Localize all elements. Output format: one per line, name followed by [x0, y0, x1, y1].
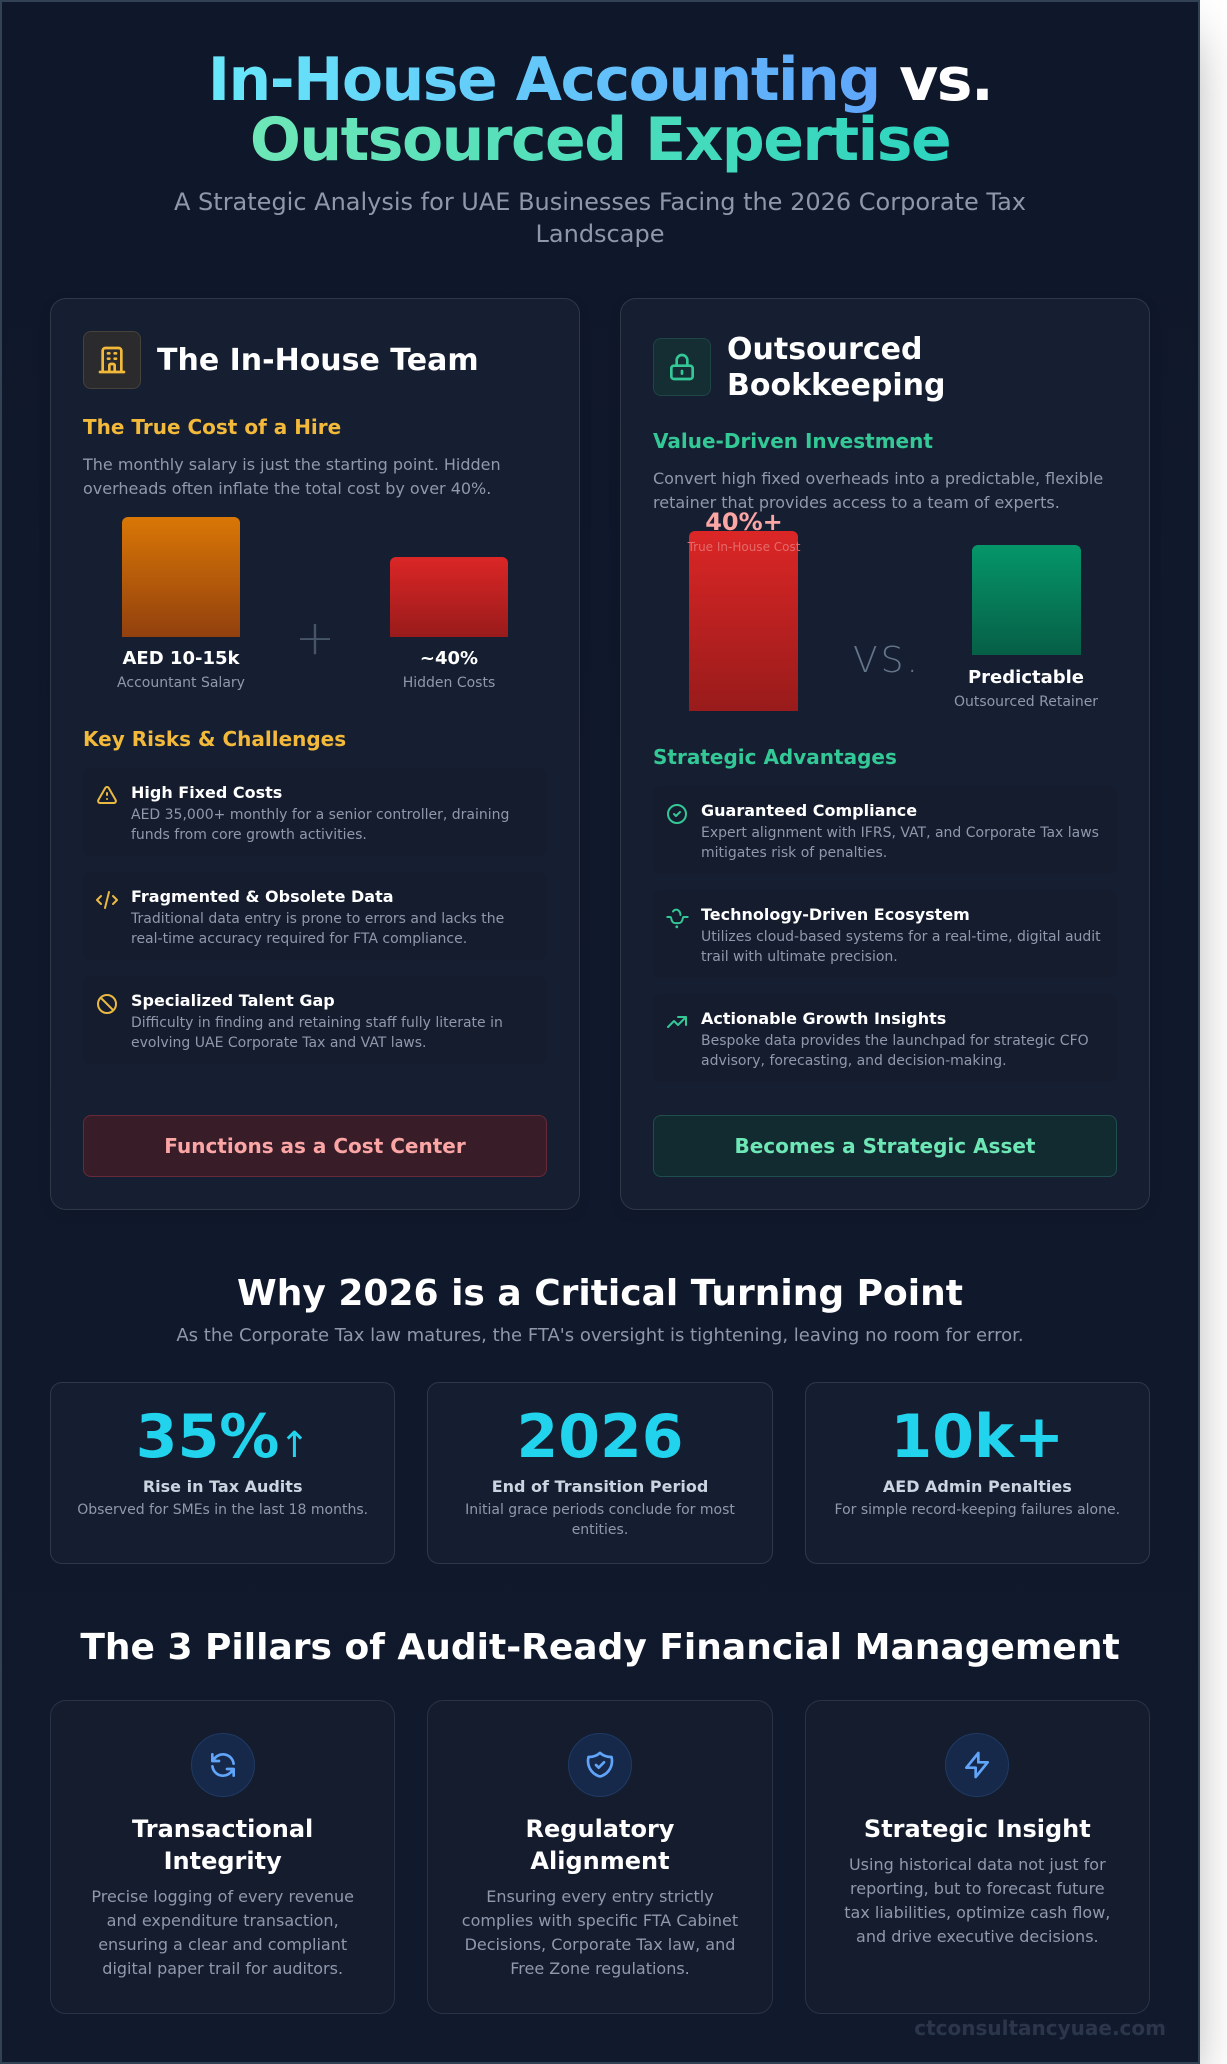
stat label: AED Admin Penalties	[883, 1477, 1072, 1496]
panel heading: The In-House Team	[157, 343, 479, 378]
pillar text: tax liabilities, optimize cash flow,	[844, 1903, 1110, 1922]
label: true in-house caption: True In-House Cost	[688, 540, 800, 554]
label: hidden costs value: ~40%	[420, 648, 478, 669]
panel heading	[727, 332, 945, 403]
text block: value intro	[653, 469, 1103, 512]
risk text	[130, 911, 504, 947]
bar: hidden costs	[390, 557, 508, 637]
icon: check circle	[667, 804, 687, 824]
subtitle: A Strategic Analysis for UAE Businesses Facing the 2026 Corporate Tax	[174, 188, 1026, 216]
callout: strategic asset	[653, 1115, 1117, 1177]
icon: shield check	[568, 1733, 632, 1797]
risk text	[131, 1015, 503, 1051]
advantage title: Guaranteed Compliance	[701, 801, 917, 820]
heading: why 2026: Why 2026 is a Critical Turning Point	[237, 1273, 963, 1314]
pillar title	[526, 1815, 674, 1875]
bar: accountant salary	[122, 517, 240, 637]
icon: warning	[97, 786, 117, 804]
stat number: 10k+	[890, 1402, 1064, 1472]
stat number: 2026	[516, 1402, 683, 1472]
risk: fragmented data	[83, 872, 547, 960]
heading: value-driven investment: Value-Driven Investment	[653, 429, 933, 453]
icon: trending up	[667, 1016, 687, 1028]
icon: lock	[653, 338, 711, 396]
heading: 3 pillars: The 3 Pillars of Audit-Ready Financial Management	[80, 1627, 1120, 1668]
title: Outsourced Expertise	[250, 105, 950, 175]
advantage text: trail with ultimate precision.	[701, 949, 898, 965]
callout: cost center: Functions as a Cost Center	[164, 1134, 466, 1158]
pillar text: complies with specific FTA Cabinet	[462, 1911, 738, 1930]
panel heading: Outsourced	[727, 332, 922, 367]
panel: outsourced bookkeeping	[620, 298, 1150, 1210]
risk title: Specialized Talent Gap	[131, 991, 335, 1010]
pillar text: Ensuring every entry strictly	[486, 1887, 714, 1906]
label: true in-house value: 40%+	[705, 508, 783, 536]
pillar title: Transactional	[132, 1815, 313, 1843]
advantage text	[701, 1033, 1089, 1069]
label: predictable caption: Outsourced Retainer	[954, 694, 1098, 710]
risk text	[131, 807, 509, 843]
pillar title: Alignment	[530, 1847, 670, 1875]
risk: talent gap	[83, 976, 547, 1064]
stat number: 35%↑	[136, 1402, 310, 1472]
pillar text	[91, 1887, 354, 1978]
risk: high fixed costs	[83, 768, 547, 856]
panel: the in-house team	[50, 298, 580, 1210]
pillar text: Decisions, Corporate Tax law, and	[465, 1935, 735, 1954]
stat card: admin penalties	[805, 1382, 1150, 1564]
stat text: entities.	[572, 1522, 628, 1538]
text block: why 2026 subtitle: As the Corporate Tax law matures, the FTA's oversight is tightening, leaving no room for error.	[176, 1325, 1024, 1346]
heading: key risks: Key Risks & Challenges	[83, 727, 346, 751]
title: In-House Accounting vs.	[208, 45, 992, 115]
stat label: Rise in Tax Audits	[143, 1477, 302, 1496]
pillar text: and expenditure transaction,	[107, 1911, 339, 1930]
plus sign: +	[295, 610, 335, 666]
bar: true in-house cost	[689, 531, 798, 711]
advantage text: mitigates risk of penalties.	[701, 845, 887, 861]
label: accountant salary caption: Accountant Salary	[117, 675, 245, 691]
pillar text: reporting, but to forecast future	[850, 1879, 1105, 1898]
icon: building	[83, 331, 141, 389]
pillar title: Integrity	[164, 1847, 282, 1875]
risk text: evolving UAE Corporate Tax and VAT laws.	[131, 1035, 426, 1051]
advantage text	[701, 929, 1101, 965]
stat text	[465, 1502, 735, 1538]
subtitle: Landscape	[536, 220, 664, 248]
risk title: Fragmented & Obsolete Data	[131, 887, 394, 906]
pillar text	[462, 1887, 738, 1978]
pillar text: Precise logging of every revenue	[91, 1887, 354, 1906]
stat text: Initial grace periods conclude for most	[465, 1502, 735, 1518]
heading: strategic advantages: Strategic Advantages	[653, 745, 897, 769]
stat card: end of transition	[427, 1382, 773, 1564]
label: accountant salary value: AED 10-15k	[122, 648, 239, 669]
icon: ban	[97, 994, 117, 1014]
label: predictable value: Predictable	[968, 667, 1084, 688]
text block: value intro: retainer that provides access to a team of experts.	[653, 493, 1060, 512]
advantage title: Actionable Growth Insights	[701, 1009, 946, 1028]
risk text: Traditional data entry is prone to errors and lacks the	[131, 911, 504, 927]
advantage text	[701, 825, 1099, 861]
icon: code	[96, 891, 118, 909]
pillar text: ensuring a clear and compliant	[98, 1935, 347, 1954]
callout: cost center	[83, 1115, 547, 1177]
advantage text: Bespoke data provides the launchpad for strategic CFO	[701, 1033, 1089, 1049]
advantage: guaranteed compliance	[653, 786, 1117, 874]
panel heading: Bookkeeping	[727, 368, 945, 403]
pillar text: digital paper trail for auditors.	[102, 1959, 343, 1978]
vs text: VS.	[853, 640, 921, 681]
pillar text: and drive executive decisions.	[856, 1927, 1099, 1946]
stat card: tax audits	[50, 1382, 395, 1564]
stat label: End of Transition Period	[492, 1477, 708, 1496]
heading: true cost of a hire: The True Cost of a Hire	[83, 415, 341, 439]
advantage text: advisory, forecasting, and decision-making.	[701, 1053, 1007, 1069]
text block: cost intro	[82, 455, 501, 498]
text block: cost intro: overheads often inflate the total cost by over 40%.	[83, 479, 491, 498]
pillar title	[132, 1815, 313, 1875]
stat text: For simple record-keeping failures alone.	[835, 1502, 1120, 1518]
advantage text: Utilizes cloud-based systems for a real-time, digital audit	[701, 929, 1101, 945]
advantage title: Technology-Driven Ecosystem	[701, 905, 970, 924]
text block: value intro: Convert high fixed overheads into a predictable, flexible	[653, 469, 1103, 488]
subtitle	[174, 188, 1026, 248]
watermark: ctconsultancyuae.com	[914, 2016, 1166, 2040]
bar: outsourced retainer	[972, 545, 1081, 655]
pillar: regulatory alignment	[427, 1700, 773, 2014]
pillar title: Strategic Insight	[864, 1815, 1091, 1843]
pillar: strategic insight	[805, 1700, 1150, 2014]
advantage: growth insights	[653, 994, 1117, 1082]
pillar text: Using historical data not just for	[849, 1855, 1106, 1874]
pillar: transactional integrity	[50, 1700, 395, 2014]
risk title: High Fixed Costs	[131, 783, 282, 802]
icon: refresh	[191, 1733, 255, 1797]
stat text: Observed for SMEs in the last 18 months.	[77, 1502, 368, 1518]
label: hidden costs caption: Hidden Costs	[403, 675, 495, 691]
icon: technology	[666, 908, 689, 928]
pillar title: Regulatory	[526, 1815, 674, 1843]
icon: lightning	[945, 1733, 1009, 1797]
risk text: AED 35,000+ monthly for a senior controller, draining	[131, 807, 509, 823]
risk text: funds from core growth activities.	[131, 827, 367, 843]
advantage: technology ecosystem	[653, 890, 1117, 978]
bar chart: cost comparison	[688, 508, 1098, 711]
advantage text: Expert alignment with IFRS, VAT, and Corporate Tax laws	[701, 825, 1099, 841]
text block: cost intro: The monthly salary is just the starting point. Hidden	[83, 455, 501, 474]
bar chart: hire cost	[117, 517, 508, 691]
pillar text	[844, 1855, 1110, 1946]
risk text: real-time accuracy required for FTA compliance.	[131, 931, 467, 947]
callout: strategic asset: Becomes a Strategic Asset	[734, 1134, 1036, 1158]
pillar text: Free Zone regulations.	[510, 1959, 690, 1978]
risk text: Difficulty in finding and retaining staff fully literate in	[131, 1015, 503, 1031]
title	[208, 45, 992, 175]
